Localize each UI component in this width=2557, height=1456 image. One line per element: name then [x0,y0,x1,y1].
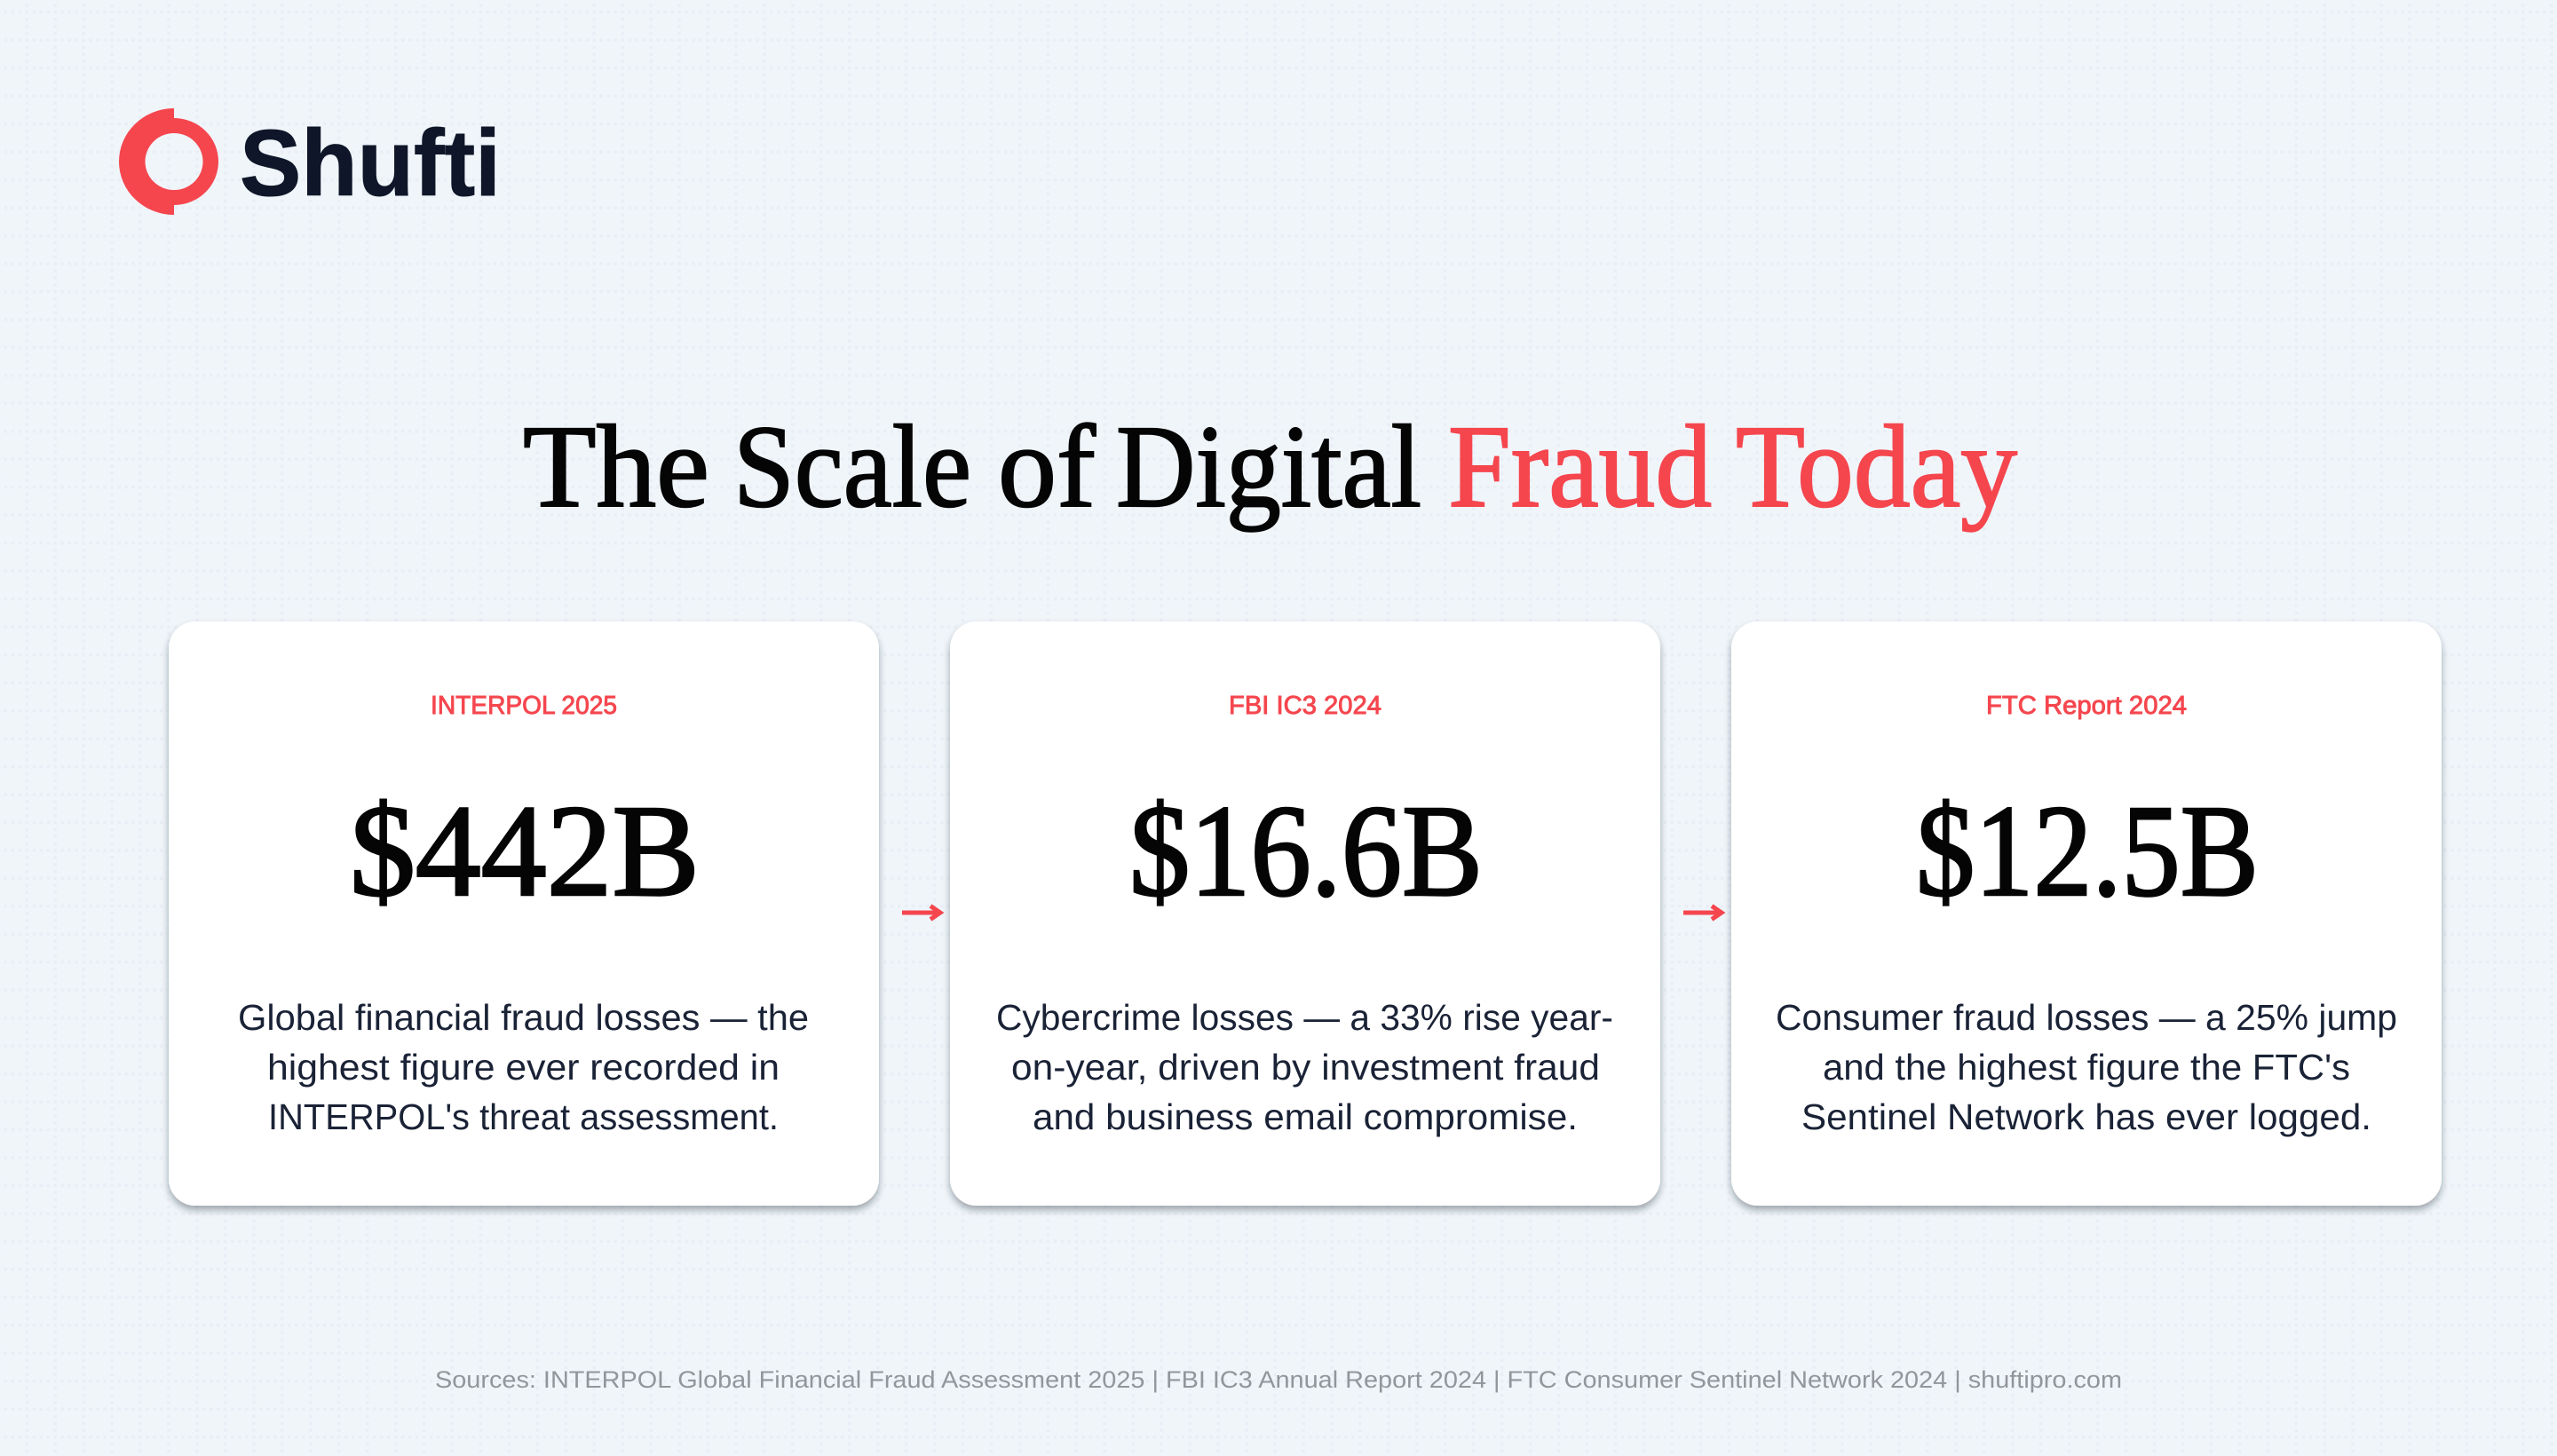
panel: FBI IC3 2024 [950,621,1660,1206]
description: INTERPOL's threat assessment. [268,1096,779,1137]
panel: INTERPOL 2025 [169,621,879,1206]
title: Fraud [1448,400,1712,532]
icon: logo ring [119,108,218,215]
logo: Shufti [119,108,501,216]
card background [950,621,1660,1206]
description: on-year, driven by investment fraud [1011,1047,1600,1088]
description: and business email compromise. [1033,1096,1578,1137]
description: Cybercrime losses — a 33% rise year- [996,997,1613,1038]
stat value: $12.5B [1916,779,2259,924]
logo wordmark: Shufti [240,111,501,216]
source label: FBI IC3 2024 [1229,692,1381,720]
card background [1731,621,2442,1206]
source label: INTERPOL 2025 [431,692,617,720]
panel: FTC Report 2024 [1731,621,2442,1206]
description [1776,997,2397,1137]
stat value: $442B [350,779,700,924]
description: Sentinel Network has ever logged. [1801,1096,2371,1137]
card background [169,621,879,1206]
title: Today [1736,400,2017,532]
arrow: second to third card [1683,906,1722,920]
description [996,997,1613,1137]
description: Consumer fraud losses — a 25% jump [1776,997,2397,1038]
description: and the highest figure the FTC's [1823,1047,2350,1088]
description: Global financial fraud losses — the [238,997,809,1038]
arrow: first to second card [902,906,941,920]
sources footer: Sources: INTERPOL Global Financial Fraud Assessment 2025 | FBI IC3 Annual Report 2024 | FTC Consumer Sentinel Network 2024 | shuftipro.com [435,1366,2122,1393]
title: The [523,400,709,532]
source label: FTC Report 2024 [1986,692,2187,720]
title: of [998,400,1096,532]
title [523,400,2017,532]
description: highest figure ever recorded in [267,1047,780,1088]
description [238,997,809,1137]
stat value: $16.6B [1129,779,1483,924]
title: Scale [733,400,971,532]
title: Digital [1116,400,1421,532]
